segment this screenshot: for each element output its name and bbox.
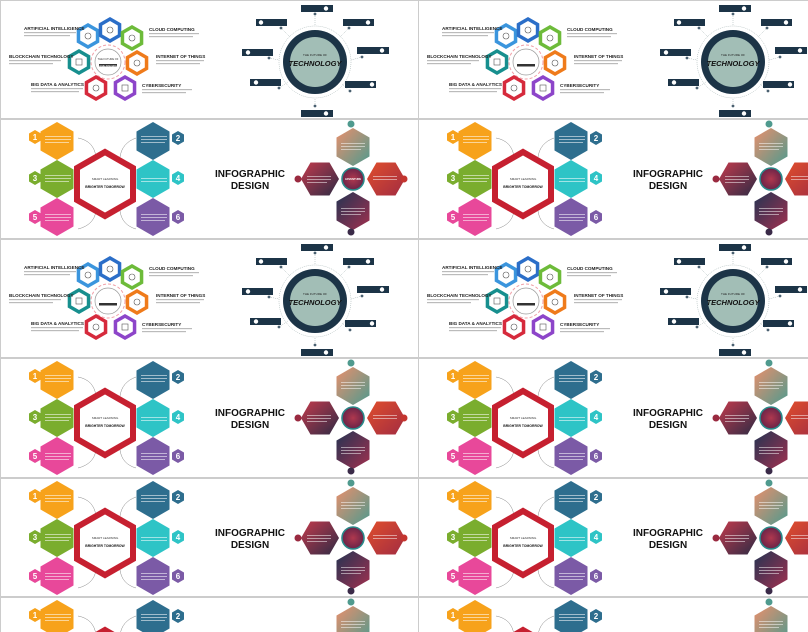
panel: smart learning hexagons: BRIGHTER TOMORROW — [503, 544, 544, 548]
tile row 4 right: learning pair — [418, 358, 808, 478]
panel: smart learning hexagons: 5 — [33, 572, 38, 581]
panel: infographic design: DESIGN — [231, 540, 269, 551]
panel: infographic design: ADVENTURE — [345, 177, 361, 181]
tile row 1 left: technology pair — [0, 0, 420, 118]
panel: infographic design: DESIGN — [649, 420, 687, 431]
panel: infographic design: DESIGN — [231, 420, 269, 431]
panel: smart learning hexagons — [447, 481, 602, 595]
panel: future of digital innovation hexagons — [427, 256, 623, 340]
tile row 6 right: learning pair (cut off) — [418, 598, 808, 632]
panel: smart learning hexagons: 6 — [176, 452, 181, 461]
panel: smart learning hexagons — [29, 361, 184, 475]
tile row 5 right: learning pair — [418, 478, 808, 596]
panel: smart learning hexagons: 1 — [33, 611, 38, 620]
panel: infographic design: INFOGRAPHIC — [633, 408, 703, 419]
panel: future of technology circle: TECHNOLOGY — [707, 298, 760, 307]
panel: smart learning hexagons: 4 — [176, 174, 181, 183]
tile row 6 left: learning pair (cut off) — [0, 598, 420, 632]
panel: future of digital innovation hexagons: CYBERSECURITY — [142, 83, 181, 88]
panel: future of digital innovation hexagons: CLOUD COMPUTING — [149, 266, 195, 271]
panel: smart learning hexagons: 6 — [176, 572, 181, 581]
panel: smart learning hexagons: 6 — [594, 572, 599, 581]
panel: smart learning hexagons: 4 — [594, 413, 599, 422]
panel: smart learning hexagons — [447, 600, 602, 632]
panel: smart learning hexagons: 4 — [176, 533, 181, 542]
panel: smart learning hexagons: 3 — [33, 174, 38, 183]
panel: smart learning hexagons: 2 — [176, 373, 181, 382]
tile row 1 right: technology pair — [418, 0, 808, 118]
panel: smart learning hexagons — [29, 481, 184, 595]
panel: smart learning hexagons: 1 — [33, 133, 38, 142]
panel: smart learning hexagons: 2 — [176, 612, 181, 621]
panel: infographic design: INFOGRAPHIC — [215, 528, 285, 539]
panel: smart learning hexagons: 4 — [594, 174, 599, 183]
panel: future of digital innovation hexagons: CYBERSECURITY — [142, 322, 181, 327]
panel: future of technology circle — [660, 5, 807, 117]
panel: infographic design: INFOGRAPHIC — [633, 169, 703, 180]
panel: smart learning hexagons: 1 — [33, 492, 38, 501]
tile row 2 left: learning pair — [0, 120, 420, 238]
panel: future of digital innovation hexagons: DIGITAL INNOVATION — [97, 64, 119, 67]
panel: future of digital innovation hexagons: INTERNET OF THINGS — [156, 293, 205, 298]
panel: infographic design: INFOGRAPHIC — [215, 408, 285, 419]
panel: future of technology circle: THE FUTURE OF — [303, 53, 327, 57]
panel: future of digital innovation hexagons: CLOUD COMPUTING — [567, 266, 613, 271]
panel: future of digital innovation hexagons: INTERNET OF THINGS — [574, 293, 623, 298]
panel: future of technology circle: TECHNOLOGY — [289, 59, 342, 68]
panel: future of digital innovation hexagons: CLOUD COMPUTING — [149, 27, 195, 32]
panel: future of digital innovation hexagons: BIG DATA & ANALYTICS — [31, 321, 84, 326]
panel: smart learning hexagons: SMART LEARNING — [510, 177, 537, 181]
tile row 3 right: technology pair — [418, 240, 808, 358]
panel: smart learning hexagons: 3 — [451, 174, 456, 183]
panel: smart learning hexagons: 1 — [451, 492, 456, 501]
tile row 3 left: technology pair — [0, 240, 420, 358]
panel: smart learning hexagons: 5 — [451, 572, 456, 581]
panel: smart learning hexagons: BRIGHTER TOMORROW — [503, 185, 544, 189]
panel: future of technology circle — [660, 244, 807, 356]
panel: smart learning hexagons: SMART LEARNING — [92, 536, 119, 540]
panel: smart learning hexagons: SMART LEARNING — [92, 416, 119, 420]
panel: smart learning hexagons: 6 — [594, 452, 599, 461]
panel: smart learning hexagons: 5 — [33, 452, 38, 461]
panel: smart learning hexagons: 6 — [594, 213, 599, 222]
panel: future of digital innovation hexagons: ARTIFICIAL INTELLIGENCE — [24, 265, 84, 270]
tile row 2 right: learning pair — [418, 120, 808, 238]
panel: future of technology circle: THE FUTURE OF — [721, 53, 745, 57]
panel: infographic design — [633, 360, 808, 474]
panel: future of digital innovation hexagons: BLOCKCHAIN TECHNOLOGY — [427, 54, 492, 59]
panel: future of digital innovation hexagons: BLOCKCHAIN TECHNOLOGY — [9, 293, 74, 298]
panel: future of digital innovation hexagons: INTERNET OF THINGS — [574, 54, 623, 59]
panel: smart learning hexagons: SMART LEARNING — [92, 177, 119, 181]
panel: infographic design — [633, 480, 808, 594]
panel: future of technology circle: THE FUTURE OF — [721, 292, 745, 296]
panel: future of digital innovation hexagons: ARTIFICIAL INTELLIGENCE — [442, 265, 502, 270]
panel: smart learning hexagons: 2 — [594, 493, 599, 502]
panel: future of technology circle — [242, 244, 389, 356]
panel: smart learning hexagons: 3 — [451, 533, 456, 542]
panel: infographic design: DESIGN — [231, 181, 269, 192]
panel: smart learning hexagons: 5 — [33, 213, 38, 222]
panel: infographic design — [215, 120, 408, 236]
panel: future of technology circle: TECHNOLOGY — [289, 298, 342, 307]
panel: smart learning hexagons: 3 — [451, 413, 456, 422]
panel: future of digital innovation hexagons — [427, 17, 623, 101]
panel: smart learning hexagons: 5 — [451, 213, 456, 222]
panel: future of digital innovation hexagons: BIG DATA & ANALYTICS — [449, 321, 502, 326]
panel: future of technology circle — [242, 5, 389, 117]
panel: future of digital innovation hexagons: BIG DATA & ANALYTICS — [31, 82, 84, 87]
panel: smart learning hexagons — [29, 600, 184, 632]
panel: smart learning hexagons: 6 — [176, 213, 181, 222]
panel: infographic design — [215, 480, 408, 594]
tile row 5 left: learning pair — [0, 478, 420, 596]
panel: smart learning hexagons: SMART LEARNING — [510, 416, 537, 420]
panel: smart learning hexagons: BRIGHTER TOMORROW — [503, 424, 544, 428]
panel: smart learning hexagons: SMART LEARNING — [510, 536, 537, 540]
panel: smart learning hexagons: 3 — [33, 413, 38, 422]
panel: future of digital innovation hexagons: ARTIFICIAL INTELLIGENCE — [24, 26, 84, 31]
panel: smart learning hexagons: 2 — [176, 134, 181, 143]
panel: future of technology circle: TECHNOLOGY — [707, 59, 760, 68]
panel: future of digital innovation hexagons: ARTIFICIAL INTELLIGENCE — [442, 26, 502, 31]
panel: future of digital innovation hexagons — [9, 256, 205, 340]
panel: smart learning hexagons: 2 — [594, 373, 599, 382]
panel: smart learning hexagons — [29, 122, 184, 236]
panel: smart learning hexagons: 1 — [33, 372, 38, 381]
panel: infographic design — [336, 598, 370, 632]
panel: smart learning hexagons: 5 — [451, 452, 456, 461]
panel: smart learning hexagons: 1 — [451, 372, 456, 381]
panel: smart learning hexagons: 4 — [594, 533, 599, 542]
panel: smart learning hexagons: BRIGHTER TOMORROW — [85, 544, 126, 548]
panel: future of digital innovation hexagons — [9, 17, 205, 101]
panel: smart learning hexagons — [447, 361, 602, 475]
panel: smart learning hexagons: 2 — [594, 134, 599, 143]
panel: future of digital innovation hexagons: INTERNET OF THINGS — [156, 54, 205, 59]
panel: smart learning hexagons: 2 — [594, 612, 599, 621]
panel: future of digital innovation hexagons: CLOUD COMPUTING — [567, 27, 613, 32]
panel: future of digital innovation hexagons: THE FUTURE OF — [98, 57, 119, 61]
panel: future of technology circle: THE FUTURE OF — [303, 292, 327, 296]
panel: smart learning hexagons — [447, 122, 602, 236]
panel: future of digital innovation hexagons: CYBERSECURITY — [560, 83, 599, 88]
panel: smart learning hexagons: 1 — [451, 133, 456, 142]
panel: infographic design — [633, 120, 808, 236]
panel: future of digital innovation hexagons: CYBERSECURITY — [560, 322, 599, 327]
panel: infographic design: DESIGN — [649, 540, 687, 551]
panel: smart learning hexagons: 2 — [176, 493, 181, 502]
panel: smart learning hexagons: BRIGHTER TOMORROW — [85, 185, 126, 189]
panel: future of digital innovation hexagons: BIG DATA & ANALYTICS — [449, 82, 502, 87]
panel: future of digital innovation hexagons: BLOCKCHAIN TECHNOLOGY — [9, 54, 74, 59]
panel: infographic design: DESIGN — [649, 181, 687, 192]
panel: smart learning hexagons: 3 — [33, 533, 38, 542]
panel: infographic design — [754, 598, 788, 632]
panel: smart learning hexagons: BRIGHTER TOMORROW — [85, 424, 126, 428]
panel: future of digital innovation hexagons: BLOCKCHAIN TECHNOLOGY — [427, 293, 492, 298]
panel: infographic design: INFOGRAPHIC — [215, 169, 285, 180]
panel: smart learning hexagons: 1 — [451, 611, 456, 620]
panel: infographic design: INFOGRAPHIC — [633, 528, 703, 539]
panel: smart learning hexagons: 4 — [176, 413, 181, 422]
tile row 4 left: learning pair — [0, 358, 420, 478]
panel: infographic design — [215, 360, 408, 474]
